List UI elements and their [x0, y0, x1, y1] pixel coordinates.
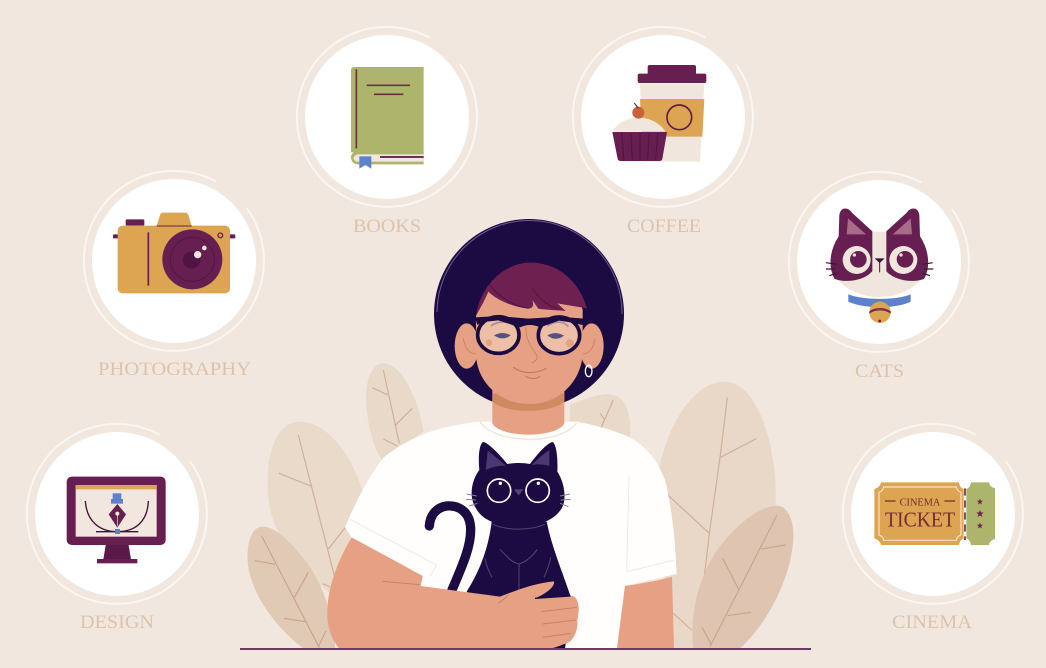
panel: design — [27, 424, 207, 633]
plants left of the person — [248, 363, 423, 648]
cat tail — [429, 506, 471, 590]
glasses — [475, 316, 584, 363]
label: CATS — [855, 361, 904, 382]
panel: cinema — [843, 424, 1023, 633]
icon: camera — [113, 213, 235, 293]
person: head — [455, 263, 604, 435]
black cat and arm — [327, 442, 579, 649]
ears — [455, 323, 604, 369]
table line — [240, 648, 811, 650]
icon: monitor with pen tool — [67, 477, 166, 563]
icon: ticket — [874, 482, 995, 545]
label: BOOKS — [353, 216, 421, 237]
icon: ticket: ★ — [976, 509, 985, 520]
face — [476, 268, 583, 404]
mouth — [513, 367, 547, 378]
icon: cat face with collar — [826, 209, 933, 323]
hair strands — [490, 285, 559, 309]
hair — [476, 263, 587, 316]
neck — [492, 390, 564, 435]
plants right of the person — [570, 382, 793, 648]
earring — [585, 365, 592, 377]
label: CINEMA — [892, 612, 972, 633]
leaf: lower left — [248, 527, 335, 648]
person: hat — [434, 219, 624, 409]
person: right arm — [617, 577, 674, 648]
icon: coffee and cupcake — [612, 65, 706, 162]
leaf: top left — [366, 363, 423, 462]
panel: coffee — [573, 27, 753, 237]
cat head — [466, 442, 571, 592]
cat body — [467, 522, 571, 649]
label: COFFEE — [627, 216, 701, 237]
icon: ticket: TICKET — [885, 509, 955, 531]
panel: photography — [84, 171, 264, 380]
icon: ticket: CINEMA — [900, 497, 941, 508]
icon: book — [351, 67, 424, 169]
leaf: small right — [570, 394, 630, 447]
arm and hand — [327, 537, 579, 649]
leaf: large right — [658, 382, 776, 648]
icon: ticket: ★ — [976, 521, 984, 531]
label: PHOTOGRAPHY — [98, 359, 251, 380]
panel: cats — [789, 172, 969, 382]
label: DESIGN — [80, 612, 154, 633]
leaf: large left — [268, 422, 363, 595]
panel: books — [297, 27, 477, 237]
leaf: lower right — [692, 506, 793, 648]
icon: ticket: ★ — [976, 496, 984, 506]
person: t-shirt — [345, 422, 677, 649]
